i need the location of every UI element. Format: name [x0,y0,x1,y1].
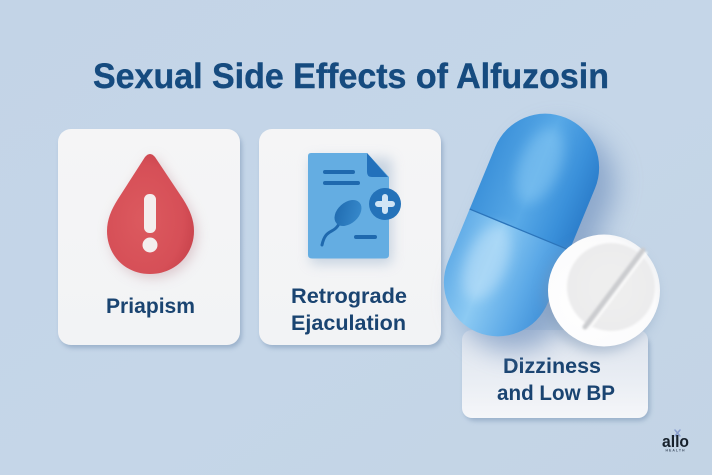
panel: priapism [58,129,242,348]
label: dizziness and low BP [497,354,615,405]
logo: allo health: allo [662,432,689,451]
label: dizziness and low BP: Dizziness [503,354,601,378]
label: priapism: Priapism [106,294,195,318]
icon: blood drop with exclamation mark [107,154,197,278]
label: dizziness and low BP: and Low BP [497,381,615,405]
panel: dizziness and low BP [462,330,650,421]
icon: blue capsule [427,97,632,368]
label: retrograde ejaculation: Retrograde [291,284,407,308]
logo: allo health: HEALTH [666,448,685,452]
icon: document with sperm and plus badge [308,153,401,264]
label: retrograde ejaculation: Ejaculation [291,311,406,335]
icon: white tablet [544,234,660,352]
label: retrograde ejaculation [291,284,407,335]
panel: retrograde ejaculation [259,129,443,348]
title: Sexual Side Effects of Alfuzosin [93,57,609,96]
